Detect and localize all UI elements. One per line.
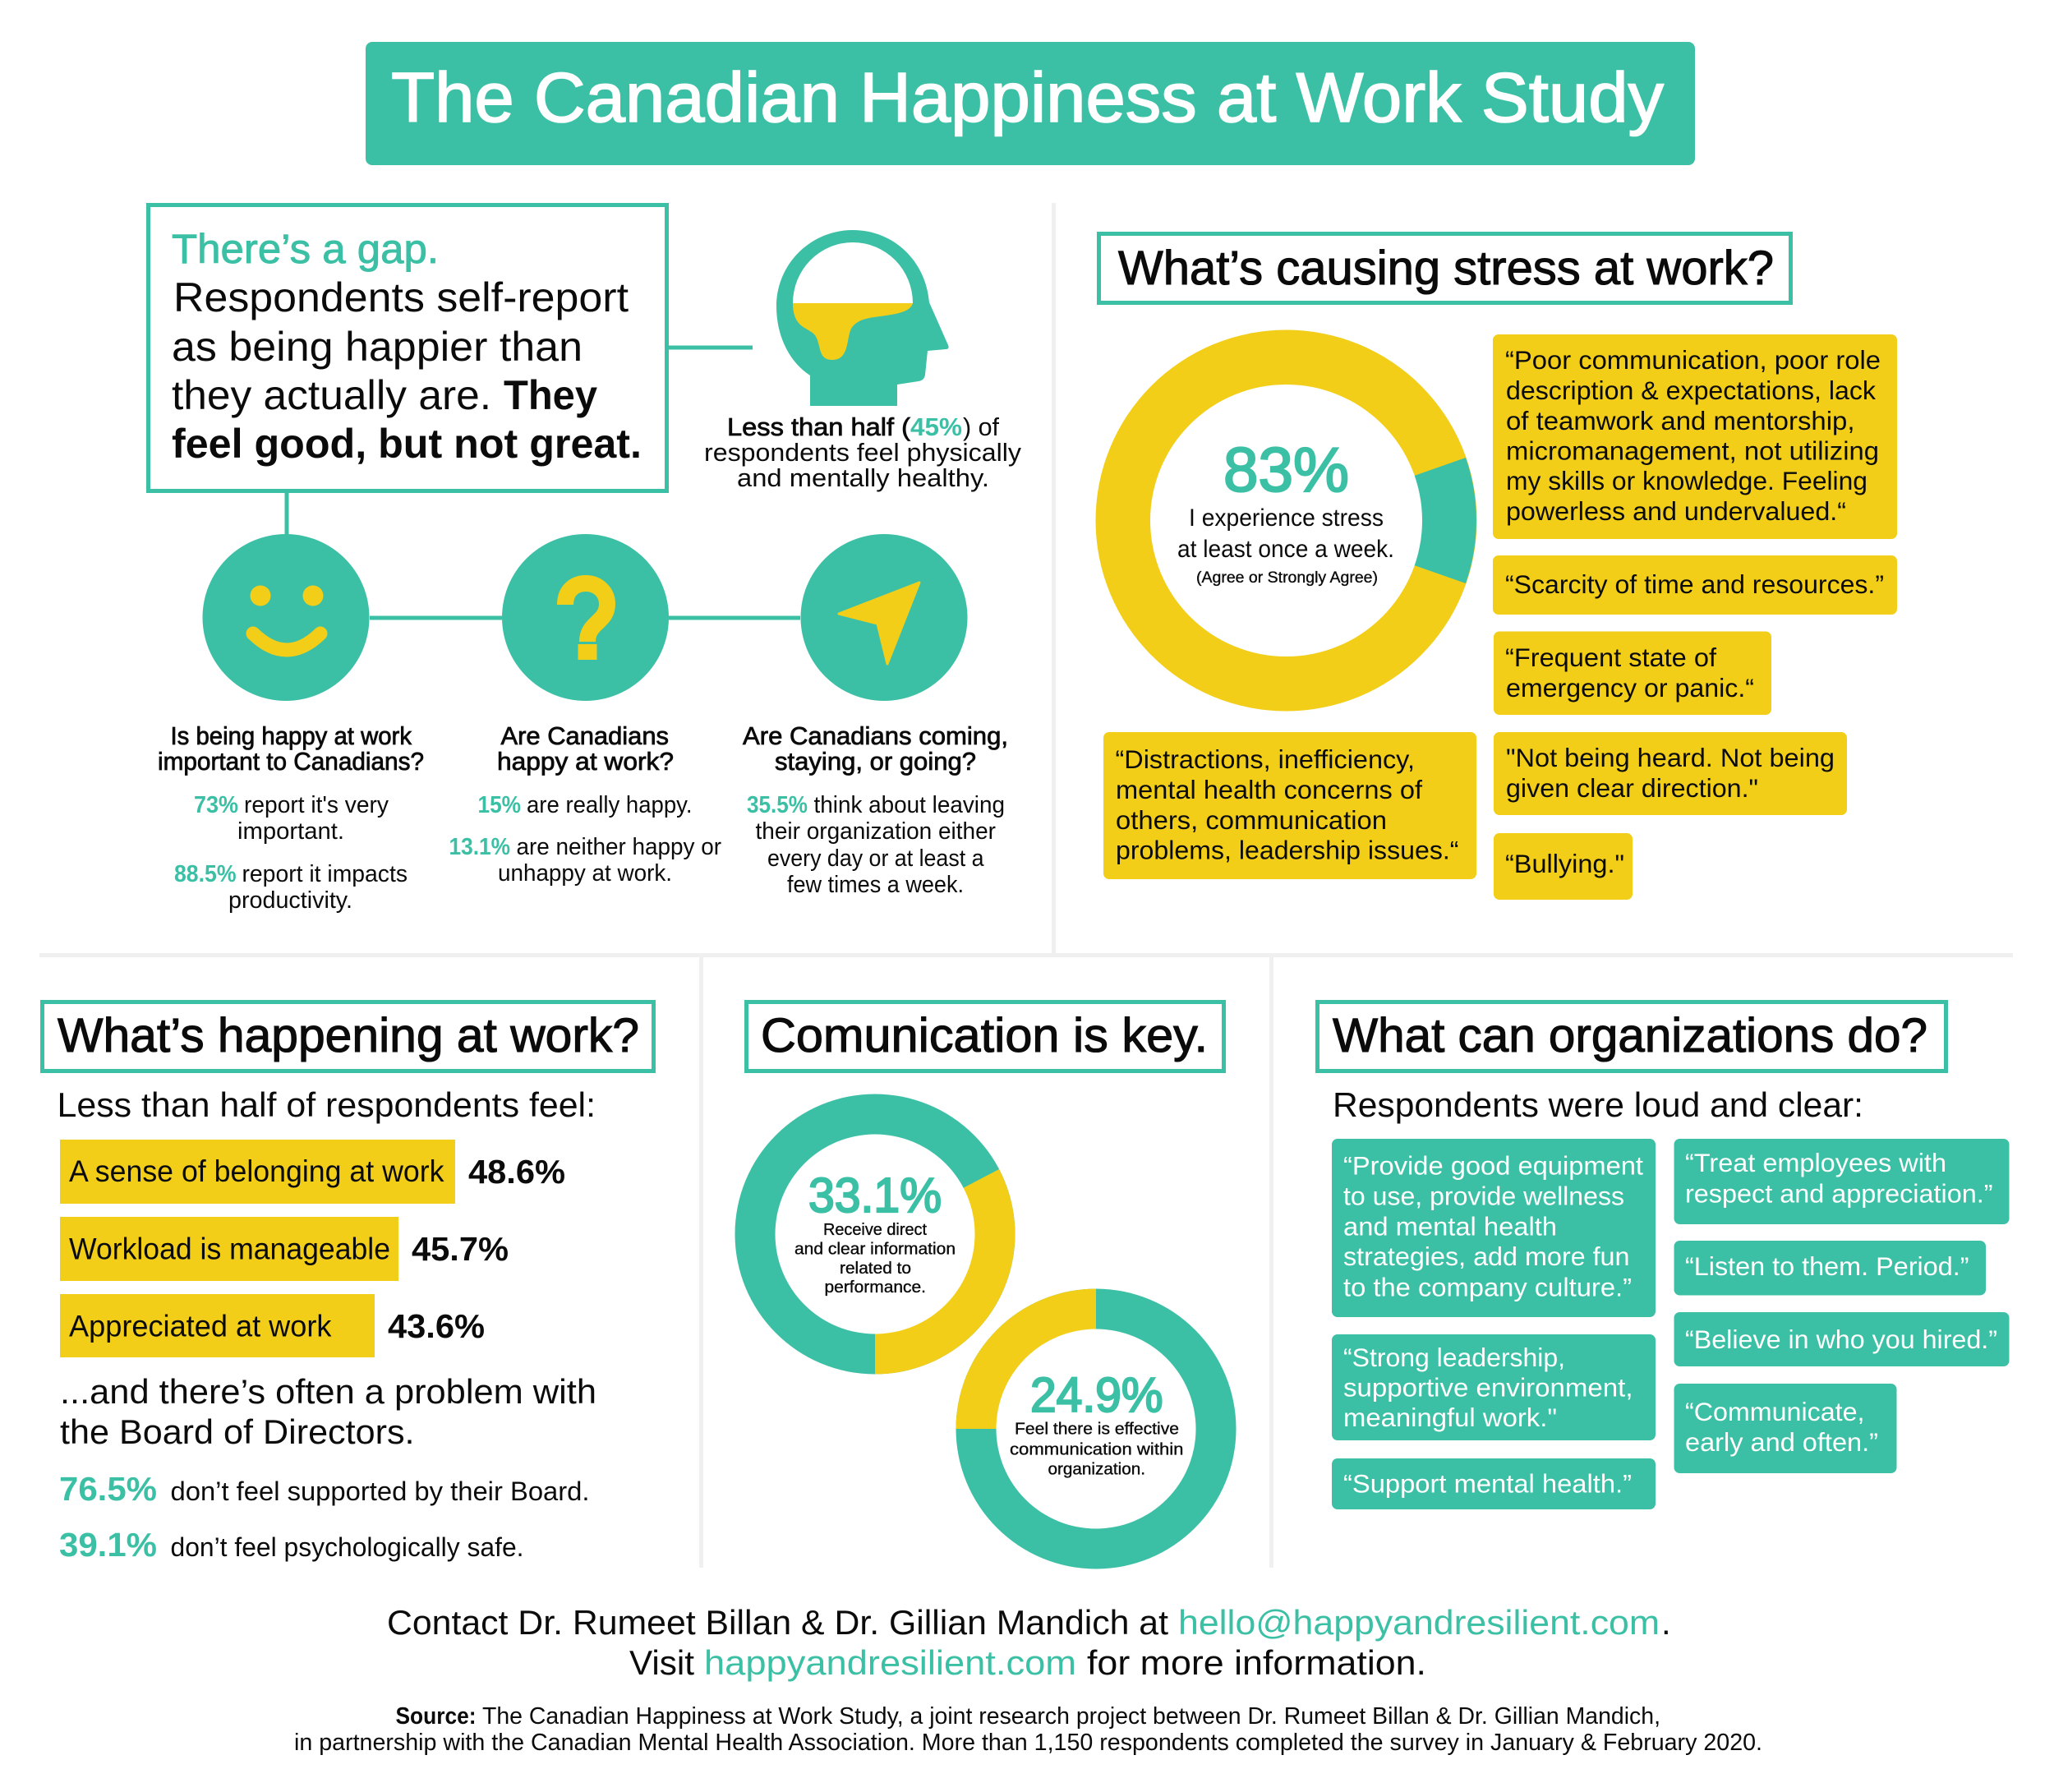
- bar chart: feelings at work: 43.6%: [388, 1307, 485, 1345]
- column: coming staying going: their organization either: [756, 818, 996, 845]
- column: is being happy important: important to Canadians?: [158, 747, 424, 776]
- quote: believe in who you hired: “Believe in who you hired.”: [1685, 1324, 1997, 1354]
- column: is being happy important: [158, 721, 424, 914]
- column: coming staying going: Are Canadians coming,: [743, 721, 1008, 750]
- quote: distractions: “Distractions, inefficiency,: [1116, 744, 1415, 774]
- quote: treat employees: “Treat employees with: [1685, 1148, 1946, 1177]
- stat: 76.5% not supported: [59, 1470, 590, 1508]
- quote: not being heard: [1494, 732, 1847, 815]
- quote: frequent emergency: “Frequent state of: [1505, 643, 1716, 672]
- quote: communicate early: “Communicate,: [1685, 1397, 1865, 1426]
- heading: communication is key: Comunication is key.: [761, 1009, 1208, 1062]
- donut chart: 24.9%: communication within: [1010, 1441, 1183, 1459]
- column: are Canadians happy: 15%: [478, 792, 521, 818]
- donut chart: 83% stress: (Agree or Strongly Agree): [1196, 569, 1378, 587]
- bar chart: feelings at work: Appreciated at work: [69, 1308, 332, 1343]
- column: is being happy important: 88.5%: [174, 861, 237, 887]
- column: is being happy important: report it's very: [244, 792, 389, 818]
- column: is being happy important: productivity.: [228, 887, 352, 914]
- quote: distractions: mental health concerns of: [1116, 775, 1422, 804]
- source note: in partnership with the Canadian Mental Health Association. More than 1,150 respondents completed the survey in January & February 2020.: [294, 1730, 1762, 1756]
- callout: there's a gap: Respondents self-report: [173, 274, 629, 320]
- quote: poor communication: “Poor communication, poor role: [1505, 345, 1881, 375]
- callout: there's a gap: feel good, but not great.: [172, 421, 642, 467]
- quote: frequent emergency: [1494, 631, 1771, 715]
- quote: distractions: others, communication: [1116, 805, 1387, 835]
- contact footer: Contact Dr. Rumeet Billan & Dr. Gillian Mandich at: [387, 1603, 1168, 1642]
- bar chart: feelings at work: 48.6%: [468, 1153, 565, 1191]
- quote: treat employees: respect and appreciation.”: [1685, 1178, 1993, 1208]
- quote: frequent emergency: emergency or panic.“: [1506, 673, 1754, 703]
- column: is being happy important: 73%: [194, 792, 238, 818]
- donut chart: 83% stress: [1096, 330, 1477, 712]
- stat: 76.5% not supported: don’t feel supported by their Board.: [171, 1476, 590, 1506]
- quote: provide good equipment: to the company culture.”: [1343, 1272, 1632, 1301]
- donut chart: 83% stress: 83%: [1223, 435, 1349, 505]
- text: less than half healthy: ) of: [963, 412, 999, 441]
- stat: 39.1% not safe: don’t feel psychologically safe.: [171, 1532, 524, 1562]
- text: less than half healthy: and mentally healthy.: [737, 463, 989, 492]
- connector lines: [284, 345, 800, 620]
- text: board of directors: the Board of Directors.: [60, 1412, 414, 1451]
- heading: what's happening: What’s happening at work?: [58, 1009, 639, 1062]
- heading: what's causing stress: What’s causing stress at work?: [1118, 242, 1774, 295]
- text: less than half feel: Less than half of respondents feel:: [58, 1085, 596, 1124]
- quote: distractions: problems, leadership issues.“: [1116, 835, 1459, 864]
- donut chart: 24.9%: Feel there is effective: [1015, 1420, 1179, 1438]
- column: are Canadians happy: Are Canadians: [501, 721, 669, 750]
- quote: provide good equipment: and mental health: [1343, 1211, 1557, 1241]
- quote: bullying: “Bullying.": [1505, 849, 1624, 878]
- quote: provide good equipment: to use, provide wellness: [1343, 1182, 1624, 1211]
- contact footer: for more information.: [1087, 1643, 1426, 1682]
- contact footer: .: [1661, 1603, 1671, 1642]
- source note: Source:: [396, 1703, 477, 1730]
- text: less than half healthy: Less than half (: [727, 412, 911, 441]
- callout: there's a gap: [148, 205, 667, 491]
- quote: strong leadership: meaningful work.": [1343, 1403, 1557, 1432]
- stat: 76.5% not supported: 76.5%: [59, 1470, 157, 1508]
- text: less than half healthy: 45%: [910, 412, 962, 441]
- quote: treat employees: [1674, 1139, 2010, 1224]
- column: are Canadians happy: [449, 721, 721, 887]
- column: coming staying going: every day or at least a: [767, 845, 984, 872]
- column: coming staying going: 35.5%: [747, 792, 808, 818]
- source note: The Canadian Happiness at Work Study, a joint research project between Dr. Rumeet Billan & Dr. Gillian Mandich,: [482, 1703, 1660, 1730]
- contact footer: happyandresilient.com: [704, 1643, 1076, 1682]
- quote: provide good equipment: [1332, 1139, 1656, 1317]
- quote: provide good equipment: “Provide good equipment: [1343, 1150, 1643, 1180]
- donut chart: 33.1%: and clear information: [794, 1241, 956, 1259]
- callout: there's a gap: There’s a gap.: [172, 226, 439, 272]
- contact footer: hello@happyandresilient.com: [1178, 1603, 1660, 1642]
- column: are Canadians happy: are neither happy or: [516, 834, 721, 860]
- contact footer: Visit: [629, 1643, 694, 1682]
- quote: distractions: [1103, 732, 1476, 879]
- quote: poor communication: my skills or knowledge. Feeling: [1506, 466, 1867, 495]
- quote: believe in who you hired: [1674, 1312, 2010, 1366]
- quote: strong leadership: [1332, 1334, 1656, 1440]
- source note: [294, 1703, 1762, 1756]
- bar chart: feelings at work: 45.7%: [412, 1230, 509, 1268]
- bar chart: feelings at work: A sense of belonging at work: [69, 1154, 444, 1188]
- column: coming staying going: few times a week.: [787, 872, 964, 898]
- quote: bullying: [1494, 833, 1633, 900]
- icon: smiley circle: [202, 534, 370, 701]
- quote: poor communication: [1493, 334, 1897, 539]
- quote: support mental health: [1332, 1458, 1656, 1509]
- column: coming staying going: think about leaving: [813, 792, 1005, 818]
- title banner: [366, 42, 1695, 165]
- stat: 39.1% not safe: [59, 1526, 524, 1564]
- callout: there's a gap: They: [504, 372, 597, 418]
- column: is being happy important: Is being happy at work: [171, 721, 412, 750]
- column: are Canadians happy: 13.1%: [449, 834, 510, 860]
- donut chart: 33.1%: performance.: [825, 1278, 926, 1297]
- donut chart: 33.1%: related to: [840, 1260, 911, 1278]
- quote: scarcity: [1493, 555, 1897, 615]
- text: board of directors: ...and there’s often a problem with: [60, 1372, 596, 1411]
- quote: not being heard: given clear direction.": [1506, 773, 1758, 803]
- quote: listen to them: [1674, 1241, 1986, 1295]
- icon: navigation arrow circle: [800, 534, 968, 701]
- quote: strong leadership: supportive environment,: [1343, 1372, 1633, 1402]
- column: are Canadians happy: unhappy at work.: [498, 860, 672, 887]
- donut chart: 33.1%: 33.1%: [808, 1168, 942, 1223]
- column: is being happy important: important.: [237, 818, 344, 845]
- icon: question mark circle: [502, 534, 669, 701]
- quote: poor communication: description & expectations, lack: [1506, 375, 1876, 405]
- callout: there's a gap: they actually are.: [172, 372, 491, 418]
- stat: 39.1% not safe: 39.1%: [59, 1526, 157, 1564]
- quote: poor communication: of teamwork and mentorship,: [1506, 406, 1855, 435]
- quote: support mental health: “Support mental health.”: [1343, 1469, 1632, 1499]
- text: less than half healthy: respondents feel physically: [704, 438, 1022, 467]
- text: less than half healthy: [704, 412, 1022, 492]
- quote: strong leadership: “Strong leadership,: [1343, 1343, 1565, 1372]
- quote: communicate early: [1674, 1384, 1896, 1473]
- column: are Canadians happy: happy at work?: [497, 747, 674, 776]
- donut chart: 33.1%: Receive direct: [823, 1221, 927, 1239]
- donut chart: 24.9%: 24.9%: [1030, 1368, 1163, 1422]
- bar chart: feelings at work: [60, 1140, 565, 1357]
- quote: communicate early: early and often.”: [1685, 1427, 1878, 1457]
- title banner: The Canadian Happiness at Work Study: [391, 59, 1665, 137]
- donut chart: 33.1%: [735, 1094, 1015, 1374]
- column: coming staying going: staying, or going?: [775, 747, 976, 776]
- quote: not being heard: "Not being heard. Not being: [1506, 743, 1835, 772]
- contact footer: [387, 1603, 1671, 1682]
- donut chart: 83% stress: I experience stress: [1189, 504, 1384, 532]
- column: are Canadians happy: are really happy.: [527, 792, 692, 818]
- callout: there's a gap: as being happier than: [172, 324, 583, 370]
- donut chart: 24.9%: [956, 1288, 1236, 1569]
- quote: listen to them: “Listen to them. Period.”: [1685, 1251, 1969, 1281]
- donut chart: 24.9%: organization.: [1048, 1461, 1145, 1479]
- column: is being happy important: report it impacts: [242, 861, 408, 887]
- quote: poor communication: powerless and undervalued.“: [1506, 496, 1846, 526]
- quote: provide good equipment: strategies, add more fun: [1343, 1242, 1630, 1271]
- quote: scarcity: “Scarcity of time and resources.”: [1505, 569, 1884, 599]
- icon: head half full: [776, 230, 949, 406]
- bar chart: feelings at work: Workload is manageable: [69, 1231, 390, 1265]
- quote: poor communication: micromanagement, not utilizing: [1506, 435, 1879, 465]
- heading: what can organizations do: What can organizations do?: [1333, 1009, 1927, 1062]
- donut chart: 83% stress: at least once a week.: [1177, 536, 1394, 563]
- text: board of directors: [60, 1372, 596, 1451]
- column: coming staying going: [743, 721, 1008, 898]
- text: loud and clear: Respondents were loud and clear:: [1333, 1085, 1863, 1124]
